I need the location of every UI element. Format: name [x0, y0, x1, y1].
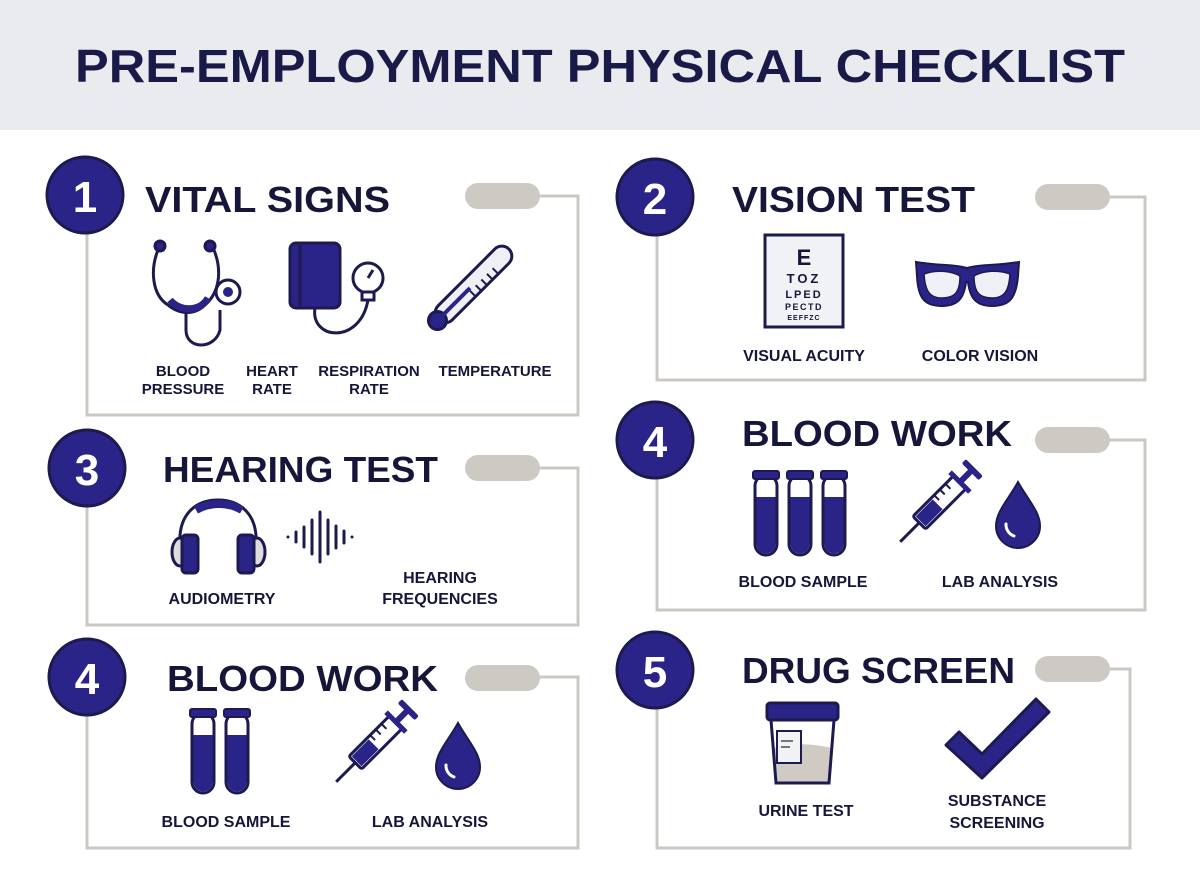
panel 4 left: blood work: BLOOD SAMPLE — [162, 814, 291, 831]
icon: eye chart: LPED — [785, 289, 823, 301]
labels: BLOOD — [156, 363, 210, 380]
heading: vision test: VISION TEST — [732, 179, 975, 220]
pill tag — [465, 183, 540, 209]
panel 4 right: blood work: BLOOD SAMPLE — [739, 574, 868, 591]
header band — [0, 0, 1200, 130]
icon: eye chart: E — [797, 245, 811, 270]
labels: RESPIRATION — [318, 363, 420, 380]
badge 2 — [617, 159, 693, 235]
heading: vital signs: VITAL SIGNS — [145, 179, 390, 220]
labels: HEART — [246, 363, 298, 380]
heading: drug screen: DRUG SCREEN — [742, 650, 1015, 691]
labels: RATE — [349, 381, 389, 398]
badge 2: 2 — [643, 175, 667, 224]
labels: RATE — [252, 381, 292, 398]
icon: urine cup — [767, 703, 838, 783]
heading: blood work: BLOOD WORK — [167, 658, 438, 699]
badge 5: 5 — [643, 648, 667, 697]
icon: blood pressure cuff — [290, 243, 383, 333]
icon: eye chart — [765, 235, 843, 327]
icon: eye chart: EEFFZC — [787, 315, 821, 322]
badge 4: 4 — [75, 655, 100, 704]
heading: blood work: BLOOD WORK — [742, 413, 1012, 454]
icon: checkmark — [946, 699, 1049, 778]
icon: syringe — [326, 698, 420, 792]
icon: drop — [996, 482, 1040, 548]
badge 3: 3 — [75, 446, 99, 495]
panel 5: drug screen — [617, 632, 1130, 848]
badge 4 — [617, 402, 693, 478]
icon: eye chart: TOZ — [787, 271, 821, 286]
heading: hearing test: HEARING TEST — [163, 449, 438, 490]
badge 5 — [617, 632, 693, 708]
panel 2: vision test: COLOR VISION — [922, 348, 1038, 365]
title: PRE-EMPLOYMENT PHYSICAL CHECKLIST — [75, 40, 1125, 92]
labels — [142, 363, 552, 398]
icon: syringe — [890, 458, 984, 552]
icon: drop — [436, 723, 480, 789]
panel 4 right: blood work — [617, 402, 1145, 610]
panel 1: vital signs — [47, 157, 578, 415]
labels: TEMPERATURE — [438, 363, 552, 380]
icon: eye chart: PECTD — [785, 302, 823, 312]
badge 4: 4 — [643, 418, 668, 467]
panel 4 left: blood work — [49, 639, 578, 848]
icon: tubes — [753, 471, 847, 555]
badge 3 — [49, 430, 125, 506]
panel 3: hearing test — [49, 430, 578, 625]
badge 1: 1 — [73, 173, 97, 222]
labels: PRESSURE — [142, 381, 224, 398]
panel 2: vision test: VISUAL ACUITY — [743, 348, 865, 365]
icon: stethoscope — [153, 241, 240, 345]
icon: tubes — [190, 709, 250, 793]
icon: headphones — [172, 500, 265, 573]
panel 5: drug screen: URINE TEST — [758, 803, 854, 820]
icon: glasses — [916, 262, 1019, 306]
panel 3: hearing test: FREQUENCIES — [382, 591, 498, 608]
panel 4 right: blood work: LAB ANALYSIS — [942, 574, 1058, 591]
panel 4 left: blood work: LAB ANALYSIS — [372, 814, 488, 831]
badge 1 — [47, 157, 123, 233]
panel 3: hearing test: AUDIOMETRY — [169, 591, 276, 608]
badge 4 — [49, 639, 125, 715]
panel 2: vision test — [617, 159, 1145, 380]
icon: waveform — [288, 512, 352, 562]
panel 5: drug screen: SUBSTANCE — [948, 793, 1047, 810]
panel 5: drug screen: SCREENING — [949, 815, 1045, 832]
panel 3: hearing test: HEARING — [403, 570, 477, 587]
icon: thermometer — [424, 242, 516, 334]
